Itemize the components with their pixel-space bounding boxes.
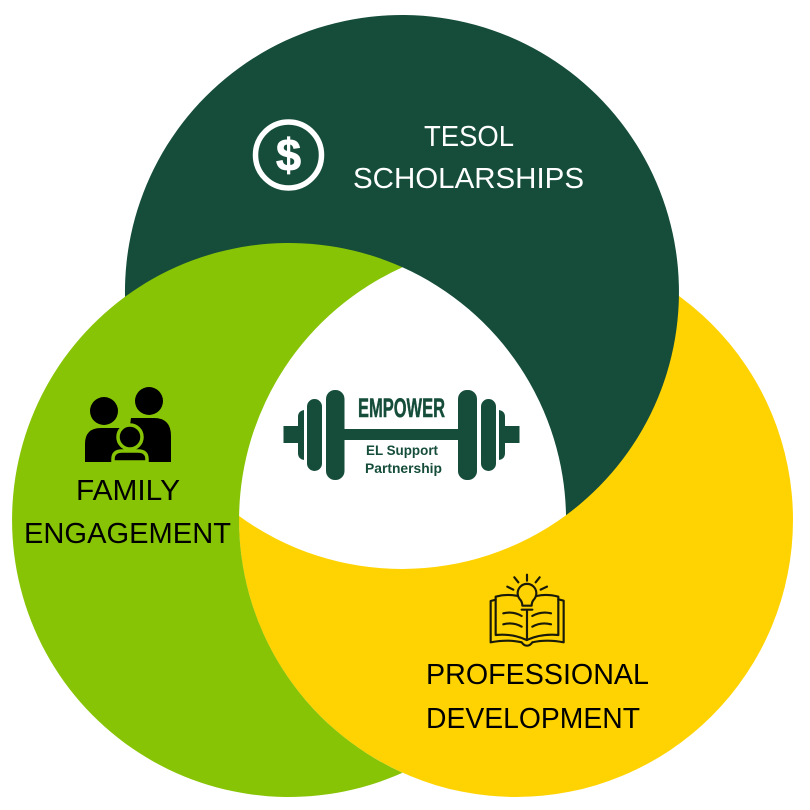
logo text: EL Support: EL Support xyxy=(366,443,438,458)
white centre region xyxy=(239,267,566,569)
circle: professional development xyxy=(239,243,793,797)
heading: family engagement: FAMILY xyxy=(76,475,180,507)
logo text: Partnership: Partnership xyxy=(365,461,442,476)
circle: TESOL scholarships xyxy=(125,15,679,515)
heading: TESOL scholarships: TESOL xyxy=(424,121,514,153)
icon: dollar coin xyxy=(256,122,322,188)
heading: professional development xyxy=(426,659,649,735)
icon: open book with light bulb xyxy=(491,575,564,646)
icon: dollar coin: $ xyxy=(276,130,301,180)
icon: family xyxy=(85,387,171,462)
heading: professional development: PROFESSIONAL xyxy=(426,659,649,691)
heading: family engagement: ENGAGEMENT xyxy=(24,518,231,550)
heading: TESOL scholarships: SCHOLARSHIPS xyxy=(353,163,584,195)
circle: family engagement xyxy=(12,243,403,797)
heading: professional development: DEVELOPMENT xyxy=(426,703,640,735)
heading: family engagement xyxy=(24,475,231,550)
logo text: EMPOWER: EMPOWER xyxy=(358,393,445,423)
heading: TESOL scholarships xyxy=(353,121,584,195)
logo: EMPOWER barbell xyxy=(284,390,520,480)
